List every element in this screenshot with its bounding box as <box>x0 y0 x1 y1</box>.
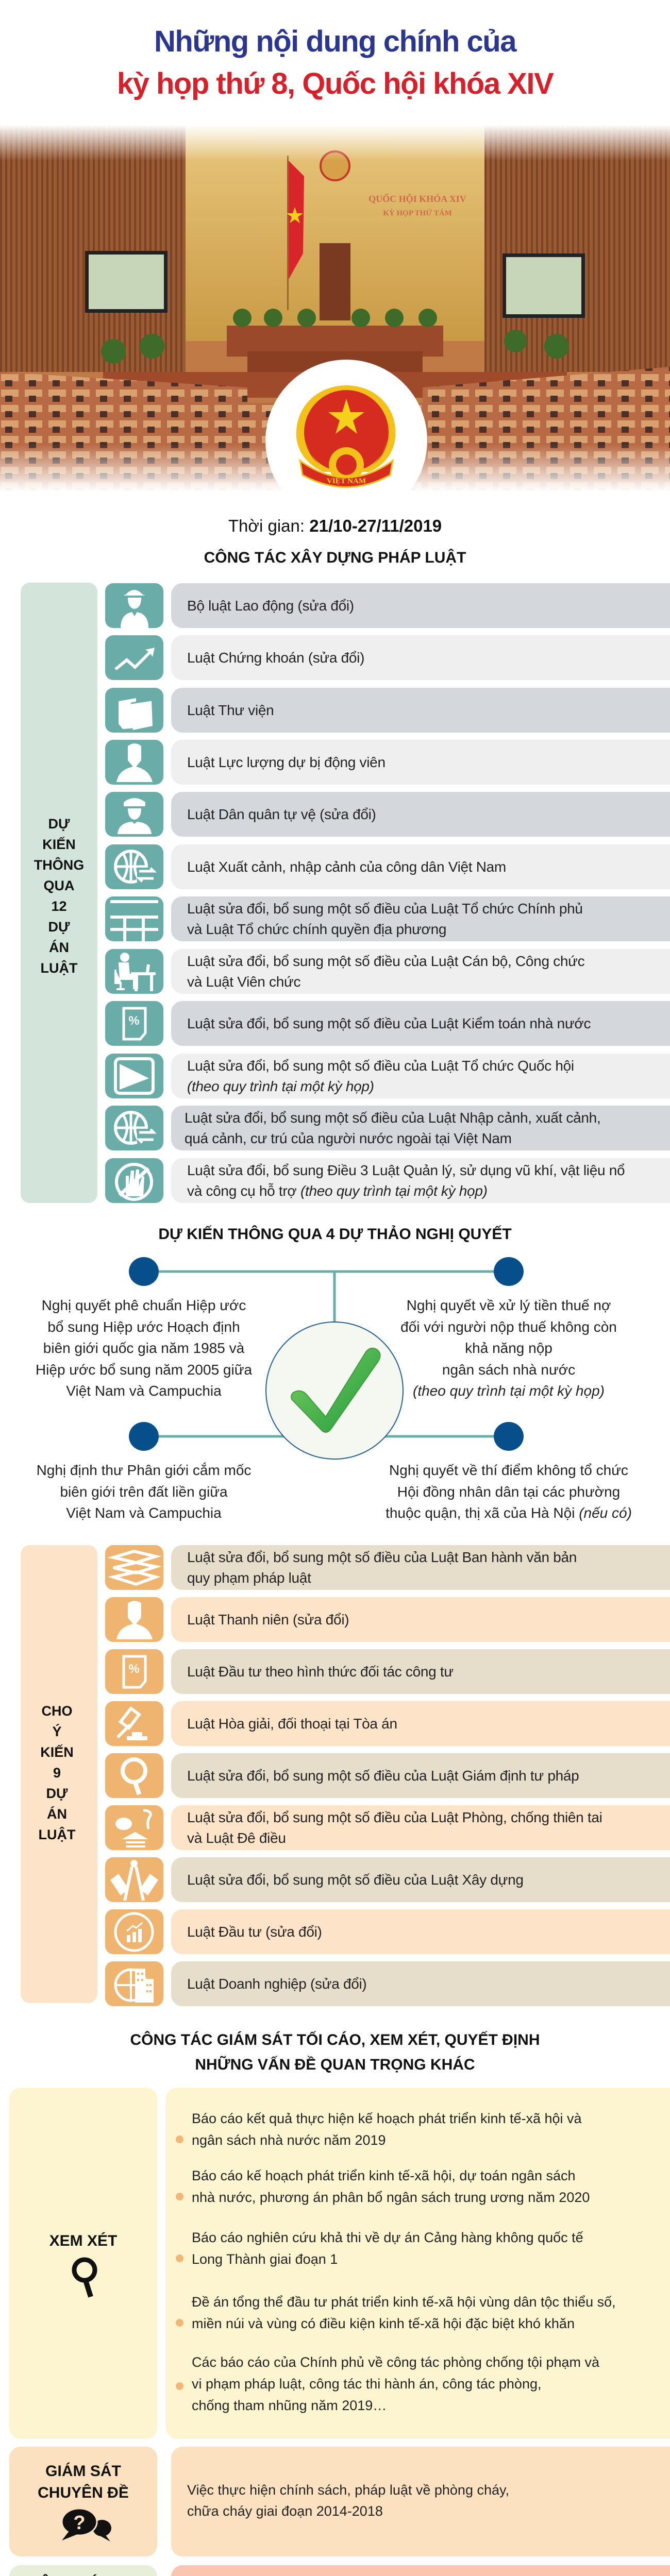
row 3 <box>105 1649 670 1694</box>
label text: DỰ <box>48 919 70 935</box>
time: Thời gian: 21/10-27/11/2019 <box>228 516 442 535</box>
row 9: Luật Doanh nghiệp (sửa đổi) <box>187 1975 366 1992</box>
text: resolution 4: Nghị quyết về thí điểm không tổ chức <box>389 1462 628 1478</box>
label text: ÁN <box>47 1806 67 1822</box>
emblem circle <box>265 360 427 521</box>
row 8 <box>105 949 670 994</box>
label text: XEM XÉT <box>49 2232 117 2249</box>
panel: xem xét: nhà nước, phương án phân bổ ngân sách trung ương năm 2020 <box>192 2190 590 2205</box>
row 5: Luật sửa đổi, bổ sung một số điều của Luật Giám định tư pháp <box>187 1767 579 1784</box>
text: resolution 1: Việt Nam và Campuchia <box>66 1383 222 1399</box>
row 11: Luật sửa đổi, bổ sung một số điều của Luật Nhập cảnh, xuất cảnh, <box>185 1110 600 1125</box>
row 5: Luật Dân quân tự vệ (sửa đổi) <box>187 806 376 822</box>
text: resolution 2: khả năng nộp <box>465 1340 552 1356</box>
text: resolution 1: biên giới quốc gia năm 1985 và <box>43 1340 244 1356</box>
heading: công tác xây dựng pháp luật: CÔNG TÁC XÂY DỰNG PHÁP LUẬT <box>204 549 466 566</box>
row 1: Bộ luật Lao động (sửa đổi) <box>187 598 354 613</box>
row 9: % <box>128 1014 140 1028</box>
panel: giám sát chuyên đề <box>9 2447 670 2556</box>
panel: 9 law projects for comment <box>21 1545 670 2006</box>
row 10: (theo quy trình tại một kỳ họp) <box>187 1078 374 1094</box>
text: resolution 1 <box>36 1297 253 1399</box>
row 5 <box>105 792 670 837</box>
row 7: Luật sửa đổi, bổ sung một số điều của Luật Tổ chức Chính phủ <box>187 901 583 916</box>
photo: national assembly hall: QUỐC HỘI KHÓA XIV <box>368 193 466 204</box>
text: resolution 4: Hội đồng nhân dân tại các phường <box>397 1484 620 1499</box>
row 9: Luật sửa đổi, bổ sung một số điều của Luật Kiểm toán nhà nước <box>187 1015 591 1031</box>
text: resolution 2 <box>400 1297 617 1399</box>
row 6: Luật sửa đổi, bổ sung một số điều của Luật Phòng, chống thiên tai <box>187 1809 602 1825</box>
diagram: 4 resolutions <box>36 1257 632 1521</box>
row 5 <box>105 1753 670 1798</box>
row 3: Luật Thư viện <box>187 702 274 718</box>
icon: speech bubbles <box>57 2507 113 2544</box>
label text: KIẾN <box>40 1744 74 1760</box>
panel: xem xét: Báo cáo nghiên cứu khả thi về dự án Cảng hàng không quốc tế <box>192 2230 583 2245</box>
panel: xem xét: chống tham nhũng năm 2019… <box>192 2398 387 2413</box>
title: Những nội dung chính của <box>154 25 516 58</box>
text: resolution 3: Việt Nam và Campuchia <box>66 1505 222 1521</box>
heading: 4 resolutions: DỰ KIẾN THÔNG QUA 4 DỰ THẢO NGHỊ QUYẾT <box>158 1226 512 1243</box>
text: resolution 2: Nghị quyết về xử lý tiền thuế nợ <box>407 1297 611 1313</box>
panel: giám sát chuyên đề: chữa cháy giai đoạn 2014-2018 <box>187 2503 383 2519</box>
row 4 <box>105 740 670 785</box>
label text: ÁN <box>49 940 69 955</box>
icon: checkmark circle <box>265 1321 404 1460</box>
title <box>117 25 554 100</box>
row 6 <box>105 1805 670 1850</box>
row 8: Luật Đầu tư (sửa đổi) <box>187 1924 322 1939</box>
icon: national emblem <box>296 385 396 488</box>
label box <box>9 2088 157 2439</box>
text: resolution 1: Hiệp ước bổ sung năm 2005 giữa <box>36 1361 252 1378</box>
row 6: và Luật Đê điều <box>187 1830 286 1845</box>
text: resolution 3: biên giới trên đất liền giữa <box>60 1484 228 1499</box>
panel: xem xét: vi phạm pháp luật, công tác thi hành án, công tác phòng, <box>192 2376 541 2392</box>
row 7: Luật sửa đổi, bổ sung một số điều của Luật Xây dựng <box>187 1871 524 1888</box>
text: resolution 2: (theo quy trình tại một kỳ họp) <box>413 1383 605 1399</box>
text: resolution 4 <box>386 1462 632 1521</box>
label box: CHUYÊN ĐỀ <box>38 2484 129 2501</box>
row 7: và Luật Tổ chức chính quyền địa phương <box>187 921 446 937</box>
content box <box>171 2565 670 2576</box>
panel: xem xét: miền núi và vùng có điều kiện kinh tế-xã hội đặc biệt khó khăn <box>192 2316 575 2331</box>
heading: supervision <box>130 2031 540 2073</box>
row 4: Luật Hòa giải, đối thoại tại Tòa án <box>187 1716 397 1731</box>
label box: GIÁM SÁT <box>45 2463 121 2480</box>
label text: QUA <box>43 878 74 893</box>
heading: supervision: CÔNG TÁC GIÁM SÁT TỐI CÁO, XEM XÉT, QUYẾT ĐỊNH <box>130 2031 540 2048</box>
label box <box>9 2565 157 2576</box>
text: resolution 3: Nghị định thư Phân giới cắm mốc <box>37 1462 251 1478</box>
panel: xem xét <box>9 2088 670 2439</box>
label box <box>9 2447 157 2556</box>
label text: DỰ <box>46 1786 68 1801</box>
panel: xem xét: Báo cáo kết quả thực hiện kế hoạch phát triển kinh tế-xã hội và <box>192 2111 582 2126</box>
label text: THÔNG <box>34 857 84 873</box>
label panel <box>21 583 97 1203</box>
row 10: Luật sửa đổi, bổ sung một số điều của Luật Tổ chức Quốc hội <box>187 1057 574 1074</box>
text: resolution 1: Nghị quyết phê chuẩn Hiệp ước <box>42 1297 246 1313</box>
label text <box>34 816 84 976</box>
row 1 <box>105 583 670 628</box>
row 9 <box>105 1001 670 1046</box>
label text: 12 <box>51 899 67 914</box>
row 12 <box>105 1158 670 1203</box>
panel: xem xét: ngân sách nhà nước năm 2019 <box>192 2132 386 2148</box>
row 12: Luật sửa đổi, bổ sung Điều 3 Luật Quản lý, sử dụng vũ khí, vật liệu nổ <box>187 1162 625 1178</box>
panel: xem xét: Các báo cáo của Chính phủ về công tác phòng chống tội phạm và <box>192 2354 599 2370</box>
label text: Ý <box>52 1724 62 1739</box>
row 7 <box>105 1857 670 1902</box>
photo: national assembly hall <box>0 126 670 489</box>
row 3: % <box>128 1662 140 1676</box>
row 1: quy phạm pháp luật <box>187 1569 311 1586</box>
row 12: và công cụ hỗ trợ (theo quy trình tại một kỳ họp) <box>187 1183 488 1198</box>
text: resolution 4: thuộc quận, thị xã của Hà Nội (nếu có) <box>386 1505 632 1521</box>
row 6 <box>105 844 670 889</box>
text: resolution 1: bổ sung Hiệp ước Hoạch định <box>47 1319 240 1334</box>
panel: xem xét: Đề án tổng thể đầu tư phát triển kinh tế-xã hội vùng dân tộc thiểu số, <box>192 2294 616 2310</box>
label text: 9 <box>53 1765 61 1781</box>
panel: 12 law projects <box>21 583 670 1203</box>
row 8: Luật sửa đổi, bổ sung một số điều của Luật Cán bộ, Công chức <box>187 953 584 969</box>
row 10 <box>105 1054 670 1098</box>
row 4: Luật Lực lượng dự bị động viên <box>187 754 386 770</box>
connector lines <box>129 1257 524 1451</box>
text: resolution 2: đối với người nộp thuế không còn <box>400 1319 617 1334</box>
row 9 <box>105 1961 670 2006</box>
row 11: quá cảnh, cư trú của người nước ngoài tại Việt Nam <box>185 1130 512 1146</box>
row 6: Luật Xuất cảnh, nhập cảnh của công dân Việt Nam <box>187 858 506 875</box>
heading: supervision: NHỮNG VẤN ĐỀ QUAN TRỌNG KHÁC <box>195 2056 475 2073</box>
panel: công tác sự nhân sự <box>0 2565 670 2576</box>
content box <box>166 2088 670 2439</box>
row 11 <box>105 1106 670 1150</box>
row 8 <box>105 1909 670 1954</box>
label text: LUẬT <box>38 1827 75 1842</box>
text: resolution 3 <box>37 1462 251 1521</box>
label text: DỰ <box>48 816 70 832</box>
label text: CHO <box>41 1703 72 1719</box>
panel: xem xét: Báo cáo kế hoạch phát triển kinh tế-xã hội, dự toán ngân sách <box>192 2168 576 2183</box>
label text: LUẬT <box>40 960 77 976</box>
row 2 <box>105 635 670 680</box>
row 2: Luật Chứng khoán (sửa đổi) <box>187 649 364 666</box>
label text: KIẾN <box>42 837 76 852</box>
row 4 <box>105 1701 670 1746</box>
icon: speech bubbles: ? <box>73 2512 86 2534</box>
label text <box>38 1703 75 1842</box>
row 1: Luật sửa đổi, bổ sung một số điều của Luật Ban hành văn bản <box>187 1549 577 1565</box>
row 2 <box>105 1597 670 1642</box>
label panel <box>21 1545 97 2003</box>
panel: xem xét: Long Thành giai đoạn 1 <box>192 2251 338 2267</box>
row 7 <box>105 896 670 941</box>
row 2: Luật Thanh niên (sửa đổi) <box>187 1612 349 1627</box>
row 8: và Luật Viên chức <box>187 974 300 989</box>
row 3 <box>105 688 670 733</box>
icon: national emblem: VIỆT NAM <box>327 477 366 485</box>
bullet items <box>176 2136 183 2143</box>
icon: magnifier <box>72 2258 97 2298</box>
text: resolution 2: ngân sách nhà nước <box>442 1361 575 1378</box>
photo: national assembly hall: KỲ HỌP THỨ TÁM <box>383 209 452 217</box>
row 3: Luật Đầu tư theo hình thức đối tác công tư <box>187 1663 454 1680</box>
panel: giám sát chuyên đề: Việc thực hiện chính sách, pháp luật về phòng cháy, <box>187 2482 509 2498</box>
row 1 <box>105 1545 670 1590</box>
title: kỳ họp thứ 8, Quốc hội khóa XIV <box>117 67 553 100</box>
content box <box>171 2447 670 2556</box>
